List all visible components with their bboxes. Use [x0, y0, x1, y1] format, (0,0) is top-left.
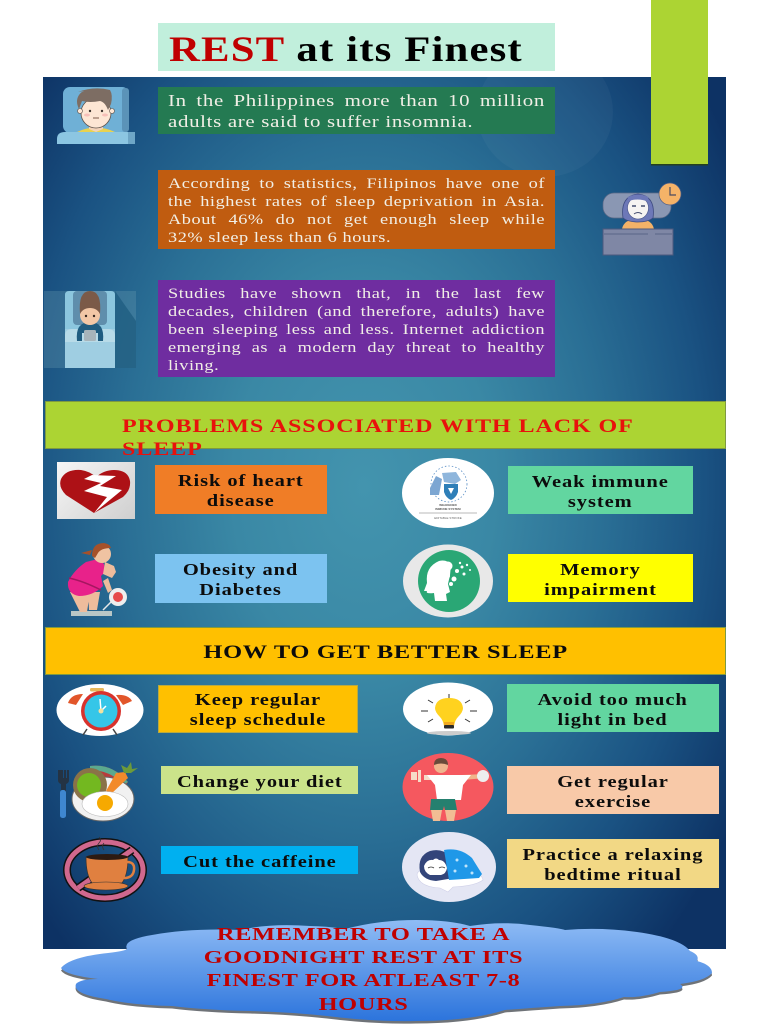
- card: memory: Memory: [560, 560, 641, 579]
- text block: statistics: According to statistics, Filipinos have one of: [168, 176, 545, 192]
- card: memory: [508, 554, 693, 602]
- icon: alarm clock: [56, 684, 144, 736]
- icon: overweight woman on scale: [68, 543, 127, 616]
- text block: studies: living.: [168, 358, 219, 374]
- card: heart disease: Risk of heart: [178, 470, 304, 490]
- icon: memory head: [403, 544, 493, 618]
- card: immune: system: [568, 492, 633, 510]
- card: exercise: Get regular: [557, 772, 669, 791]
- icon: exerciser: [402, 753, 494, 821]
- icon: tired woman with clock: [602, 182, 682, 256]
- icon: food plate: [58, 762, 138, 822]
- card: bedtime ritual: [507, 839, 719, 888]
- card: caffeine: [161, 846, 358, 874]
- cloud callout: [61, 920, 712, 1024]
- card: keep schedule: sleep schedule: [190, 710, 326, 729]
- card: diet: [161, 766, 358, 794]
- card: heart disease: [155, 465, 327, 514]
- card: keep schedule: [158, 685, 358, 733]
- cloud message: FINEST FOR ATLEAST 7-8: [207, 970, 520, 990]
- card: avoid light: light in bed: [558, 710, 668, 728]
- text block: insomnia: In the Philippines more than 10 million: [168, 91, 545, 110]
- title: REST at its Finest: [169, 29, 523, 69]
- text block: studies: [158, 280, 555, 377]
- heading: problems text: SLEEP: [122, 438, 203, 460]
- icon: sleeping penguin: [402, 832, 496, 902]
- heading: problems text: PROBLEMS ASSOCIATED WITH LACK OF: [122, 416, 634, 437]
- cloud message: REMEMBER TO TAKE A: [217, 924, 510, 944]
- icon: immune system: [402, 458, 494, 528]
- icon: light bulb: [403, 682, 493, 736]
- card: exercise: exercise: [575, 792, 651, 811]
- card: obesity: Obesity and: [183, 560, 299, 578]
- text block: studies: been sleeping less and less. Internet addiction: [168, 322, 545, 338]
- card: exercise: [507, 766, 719, 814]
- cloud message: [204, 924, 523, 1014]
- text block: statistics: 32% sleep less than 6 hours.: [168, 230, 391, 246]
- card: obesity: [155, 554, 327, 603]
- icon: immune system: IMMUNE SYSTEM: [435, 507, 461, 511]
- card: heart disease: disease: [207, 490, 275, 510]
- text block: insomnia: adults are said to suffer insomnia.: [168, 112, 473, 131]
- lime accent bar: [651, 0, 708, 164]
- icon: immune system: WEAKENED: [439, 503, 458, 507]
- icon: man awake in bed: [57, 87, 135, 144]
- text block: studies: emerging as a modern day threat to healthy: [168, 340, 545, 356]
- card: caffeine: Cut the caffeine: [183, 852, 336, 870]
- card: immune: Weak immune: [532, 472, 669, 490]
- icon: child using phone in bed: [44, 291, 136, 368]
- text block: statistics: About 46% do not get enough sleep while: [168, 212, 545, 228]
- cloud message: HOURS: [319, 994, 408, 1014]
- heading band: problems: [45, 401, 726, 449]
- card: diet: Change your diet: [177, 772, 342, 790]
- cloud message: GOODNIGHT REST AT ITS: [204, 947, 523, 967]
- card: memory: impairment: [544, 580, 657, 599]
- icon: immune system: EDITABLE STROKE: [434, 516, 462, 520]
- text block: statistics: [158, 170, 555, 249]
- card: bedtime ritual: Practice a relaxing: [523, 845, 703, 864]
- card: avoid light: Avoid too much: [538, 690, 688, 708]
- icon: broken heart: [57, 462, 135, 519]
- icon: no caffeine: [63, 836, 147, 902]
- card: avoid light: [507, 684, 719, 732]
- heading band: better sleep: [45, 627, 726, 675]
- text block: studies: Studies have shown that, in the last few: [168, 286, 545, 302]
- card: immune: [508, 466, 693, 514]
- heading band: better sleep: HOW TO GET BETTER SLEEP: [203, 642, 568, 663]
- card: keep schedule: Keep regular: [195, 690, 321, 709]
- card: obesity: Diabetes: [200, 580, 282, 598]
- background panel: [43, 77, 726, 949]
- heading: problems text: [122, 416, 634, 460]
- text block: insomnia: [158, 87, 555, 134]
- text block: statistics: the highest rates of sleep deprivation in Asia.: [168, 194, 545, 210]
- text block: studies: decades, children (and therefore, adults) have: [168, 304, 545, 320]
- card: bedtime ritual: bedtime ritual: [544, 865, 682, 884]
